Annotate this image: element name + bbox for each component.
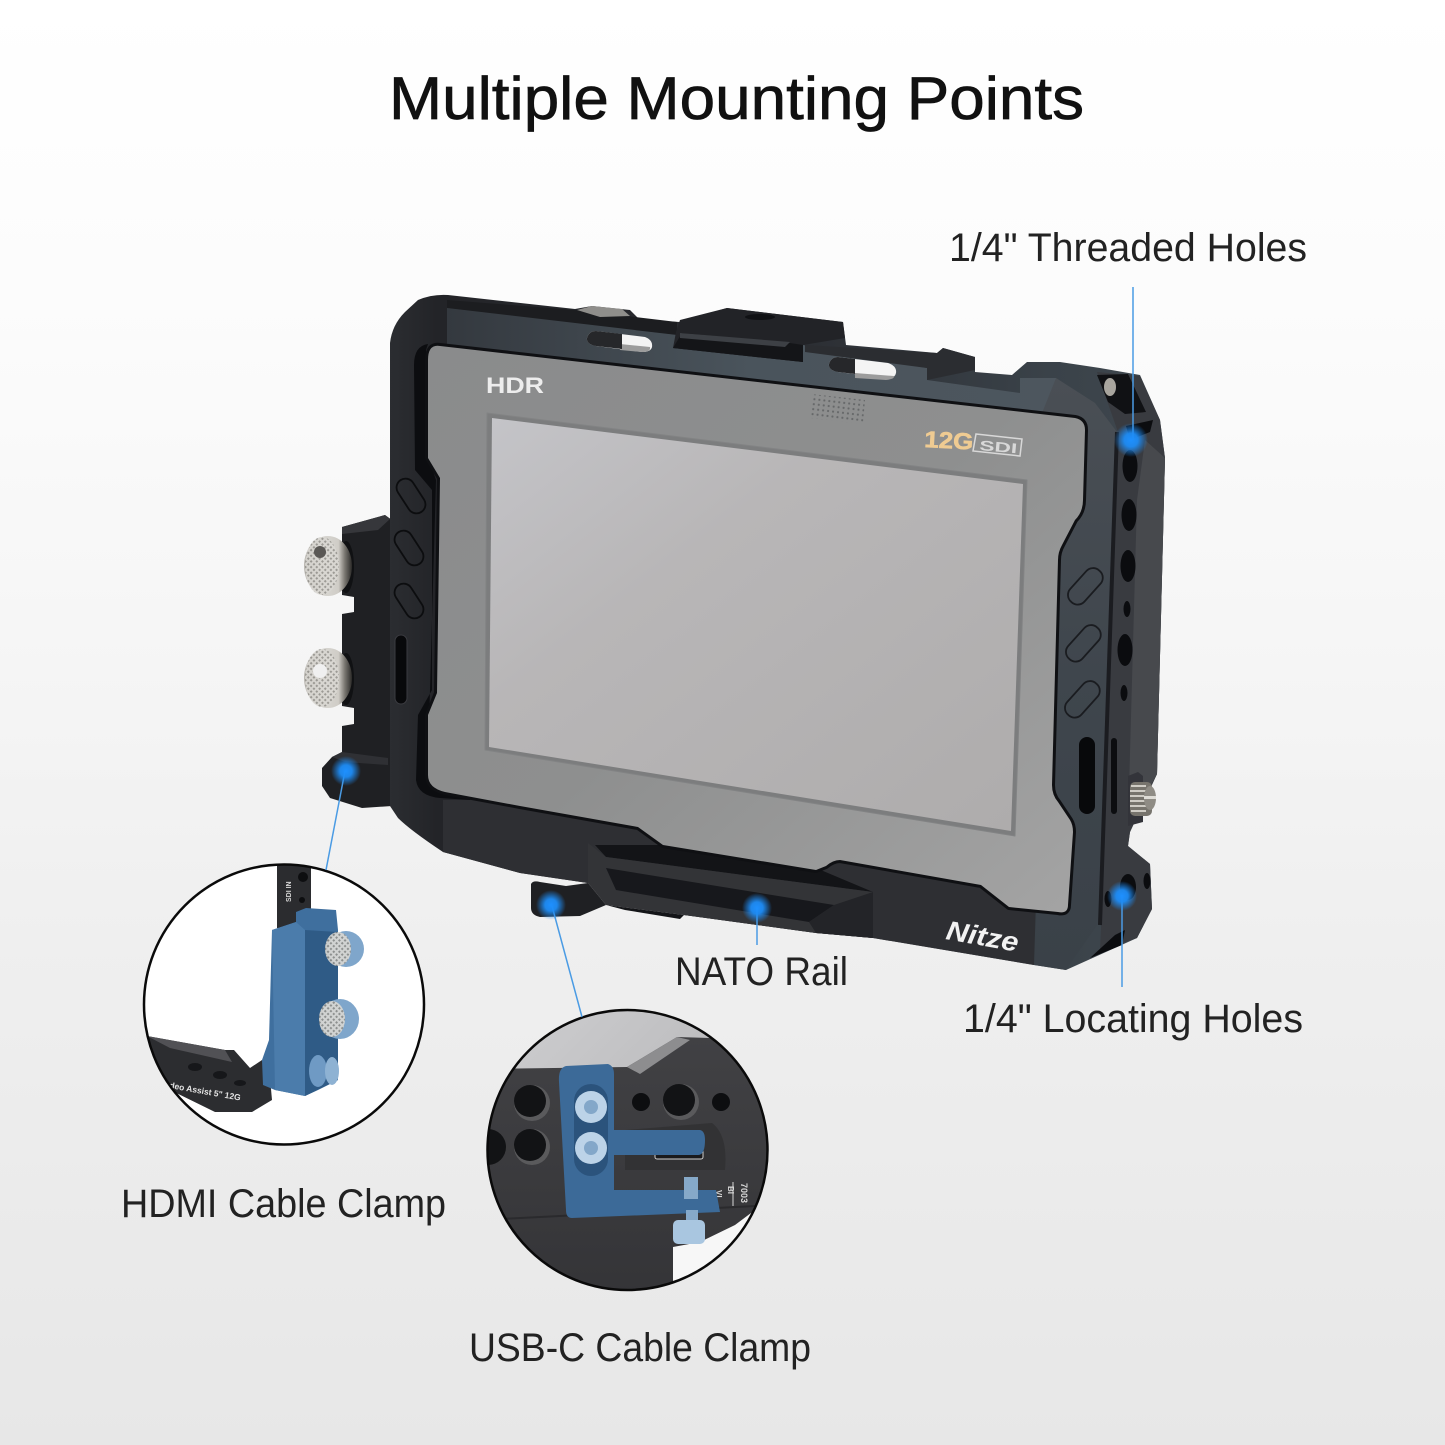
- cage body: [390, 295, 1165, 970]
- leader line: threaded holes: [1114, 287, 1148, 457]
- label: threaded holes: 1/4" Threaded Holes: [949, 226, 1307, 270]
- top rail cutouts: [587, 331, 896, 380]
- label: locating holes: 1/4" Locating Holes: [963, 997, 1303, 1041]
- right edge strip: [1097, 372, 1165, 951]
- side connector: [1128, 772, 1156, 826]
- top rail cold shoe: [805, 345, 975, 380]
- title: Multiple Mounting Points: [389, 65, 1084, 132]
- HDMI inset: blue clamp: [262, 908, 338, 1096]
- USB inset: device body: BI: [726, 1186, 735, 1194]
- 12G SDI logo: 12G: [924, 426, 974, 455]
- USB inset: blue L clamp: [559, 1064, 720, 1218]
- Nitze logo: Nitze: [944, 915, 1021, 958]
- knob: lower: [304, 648, 354, 708]
- leader line: HDMI clamp: [326, 756, 361, 870]
- top rail hot shoe: [673, 308, 845, 362]
- left cable clamp block: [304, 515, 392, 808]
- knob: upper: [304, 536, 354, 596]
- label: NATO rail: NATO Rail: [675, 950, 848, 994]
- NATO rail and cable clamp tab: [531, 843, 873, 938]
- leader line: locating holes: [1107, 881, 1137, 987]
- leader line: USB-C clamp: [536, 890, 582, 1017]
- right frame ovals and slots: [1061, 564, 1117, 814]
- product: monitor cage: [304, 295, 1165, 970]
- USB inset: device body: 7003: [739, 1183, 749, 1203]
- USB inset: thumb screw: [673, 1177, 705, 1244]
- callout circle: HDMI cable clamp: [144, 862, 424, 1144]
- speaker grille: [811, 394, 865, 424]
- USB inset: device body: VI: [714, 1190, 723, 1198]
- HDMI inset: cage edge: [145, 862, 311, 1112]
- HDMI inset: knurled knobs: [309, 931, 364, 1087]
- USB inset: device body: [488, 1037, 766, 1289]
- black wedge above NATO rail: [595, 845, 873, 892]
- HDR logo: HDR: [486, 373, 544, 398]
- front frame right face: [1034, 378, 1117, 970]
- top rail face: [447, 308, 1056, 418]
- HDMI inset: cage edge: SDI IN: [286, 881, 293, 902]
- silver part behind rail: [577, 306, 630, 317]
- callout circle: USB-C cable clamp: [470, 1010, 775, 1300]
- screen: [489, 418, 1023, 831]
- label: HDMI cable clamp: HDMI Cable Clamp: [121, 1182, 446, 1226]
- label: USB-C cable clamp: USB-C Cable Clamp: [469, 1326, 811, 1370]
- leader line: NATO rail: [742, 893, 772, 945]
- top rail dark upper band: [447, 300, 677, 335]
- screen bezel: [485, 413, 1027, 836]
- HDMI inset: cage edge: deo Assist 5" 12G: [169, 1080, 242, 1103]
- bottom rail: [443, 800, 1036, 965]
- inner black channel top-left and bottom-left: [414, 344, 470, 800]
- left frame ovals and slot: [391, 475, 429, 704]
- 12G SDI logo: SDI: [979, 437, 1018, 456]
- threaded holes: [1090, 374, 1153, 958]
- 12G SDI logo: [924, 426, 1022, 456]
- device housing: [428, 346, 1085, 912]
